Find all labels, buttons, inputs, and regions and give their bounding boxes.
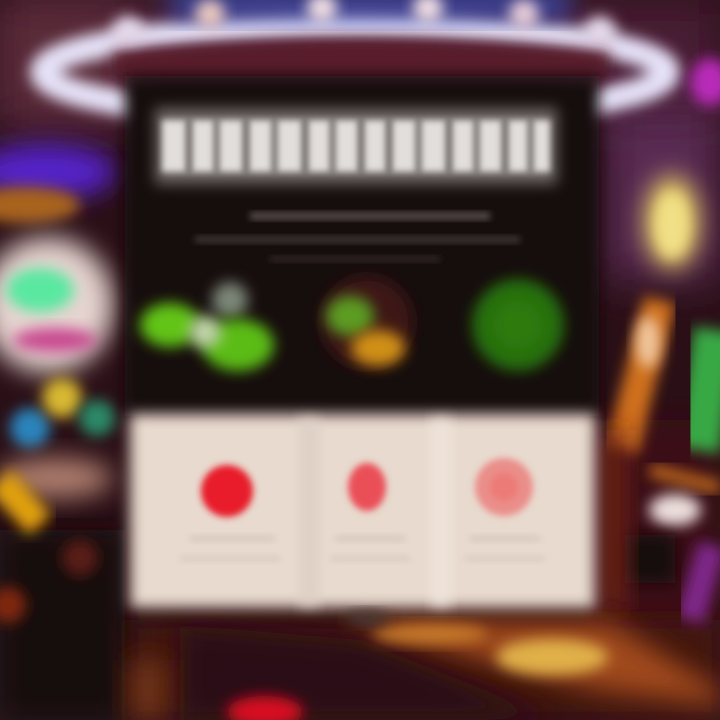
card 3 text	[465, 535, 545, 562]
icon: green hands	[140, 282, 274, 371]
card 1 text	[180, 535, 280, 562]
card 3	[465, 458, 545, 562]
panel: cream lower board	[130, 414, 595, 608]
title	[155, 108, 557, 184]
left side slot machine	[0, 144, 117, 623]
icon: multicolour badge	[321, 276, 413, 368]
right side slot machine	[600, 176, 720, 620]
ceiling light ring	[43, 0, 720, 118]
panel: dark upper board	[112, 39, 610, 416]
icon: red circle	[201, 465, 253, 517]
subtitle text lines	[195, 212, 520, 262]
icon: pink circle	[475, 458, 533, 516]
card 2 text	[330, 535, 410, 562]
icon: red shield	[348, 463, 386, 511]
icon: green circle	[472, 279, 564, 371]
small base shadow	[345, 611, 389, 625]
card 2	[330, 463, 410, 562]
card 1	[180, 465, 280, 562]
table and foreground	[130, 622, 720, 720]
